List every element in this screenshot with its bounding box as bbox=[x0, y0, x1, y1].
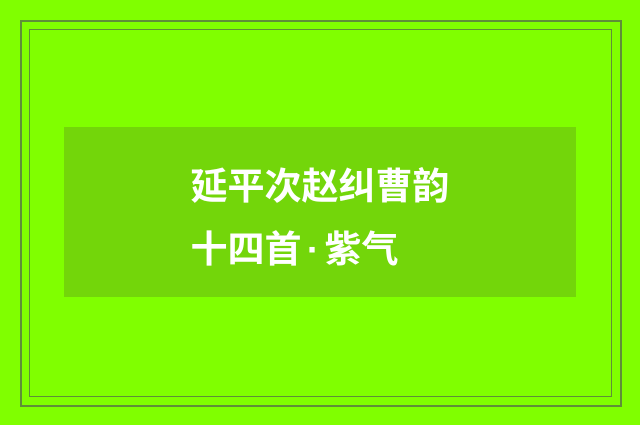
panel: title banner bbox=[64, 127, 576, 297]
inner frame border bbox=[29, 29, 612, 397]
title line 2: 十四首 紫气 bbox=[190, 229, 398, 270]
title line 1: 延平次赵纠曹韵 bbox=[190, 166, 450, 207]
title line 2: · bbox=[307, 229, 319, 270]
